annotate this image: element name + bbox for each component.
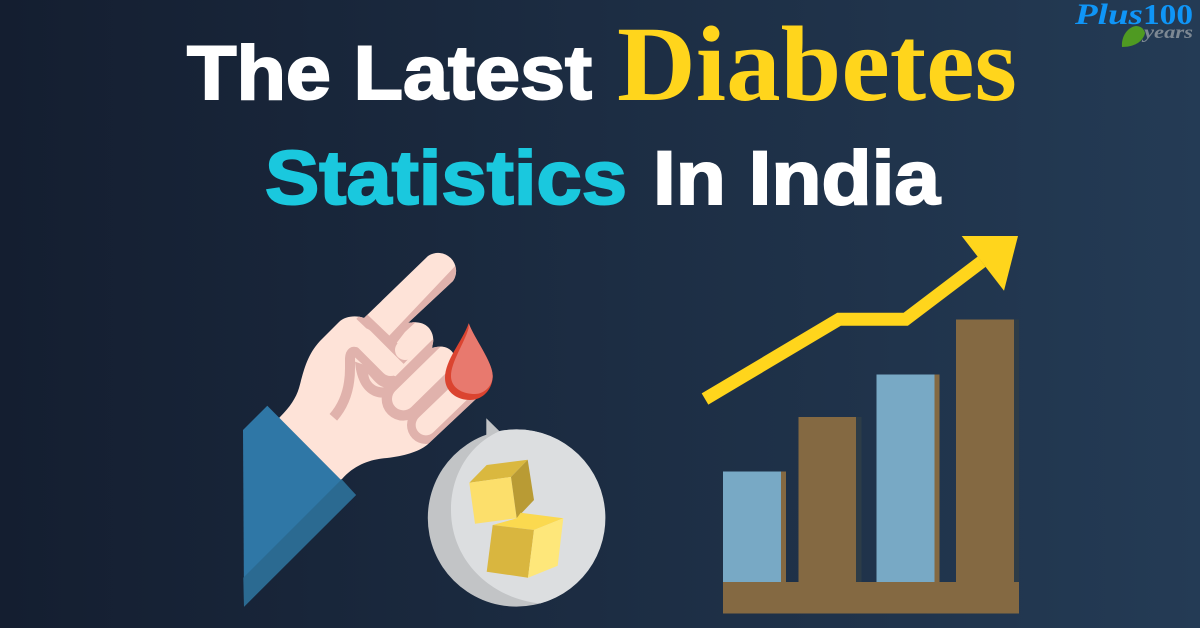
- sleeve body: [243, 406, 356, 607]
- stub finger: [405, 337, 419, 350]
- title: The Latest: The Latest: [187, 31, 592, 116]
- icon: leaf: [1122, 26, 1145, 47]
- chart base: [723, 582, 1019, 614]
- arrow head: [962, 236, 1018, 291]
- sugar cube upper: [469, 460, 534, 524]
- cube top: [493, 513, 563, 530]
- middle finger outline: [403, 356, 447, 399]
- bar 2: [798, 417, 856, 583]
- bar 3: [876, 374, 934, 582]
- thumb fold highlight: [368, 374, 384, 387]
- icon: hand with pricked finger: [279, 252, 476, 480]
- logo: Plus100 years: [1074, 0, 1193, 47]
- thumb outline: [333, 352, 385, 417]
- icon: sleeve: [243, 406, 356, 607]
- sleeve shade: [243, 479, 356, 607]
- bar 1 shadow: [781, 472, 786, 582]
- bar 3 shadow: [934, 374, 940, 582]
- icon: sugar speech bubble: [428, 418, 605, 607]
- bubble outer: [428, 429, 605, 607]
- title: [187, 6, 1017, 221]
- arrow line: [705, 262, 982, 399]
- lower finger outline: [426, 382, 470, 425]
- index base crease: [360, 315, 407, 360]
- icon: blood drop: [445, 323, 493, 400]
- cube top: [469, 460, 528, 483]
- middle finger: [403, 350, 453, 399]
- title: In India: In India: [653, 136, 941, 221]
- lower finger: [426, 379, 473, 425]
- bubble inner: [451, 429, 605, 604]
- thumb fold: [355, 362, 396, 398]
- logo wordmark 100: 100: [1143, 0, 1193, 31]
- cube front: [487, 525, 534, 578]
- title: Diabetes: Diabetes: [617, 6, 1017, 124]
- bar chart: [723, 320, 1019, 614]
- title: Statistics: Statistics: [265, 136, 627, 221]
- knuckle: [363, 338, 391, 366]
- cube front: [469, 477, 517, 524]
- bubble tail: [486, 418, 500, 438]
- cube side: [528, 518, 563, 578]
- bar 4: [956, 320, 1014, 582]
- logo wordmark years: years: [1141, 22, 1193, 42]
- hand shape: [279, 252, 476, 480]
- drop dark edge: [445, 323, 493, 400]
- bar 1: [723, 472, 781, 582]
- drop highlight: [451, 323, 493, 394]
- bar 4 shadow: [1014, 320, 1019, 582]
- index finger shade: [390, 266, 456, 342]
- cube side: [511, 460, 534, 518]
- bar 2 shadow: [856, 417, 862, 583]
- sugar cube lower: [487, 513, 563, 578]
- finger creases in detail: [333, 315, 473, 425]
- arrow: rising trend: [705, 236, 1018, 399]
